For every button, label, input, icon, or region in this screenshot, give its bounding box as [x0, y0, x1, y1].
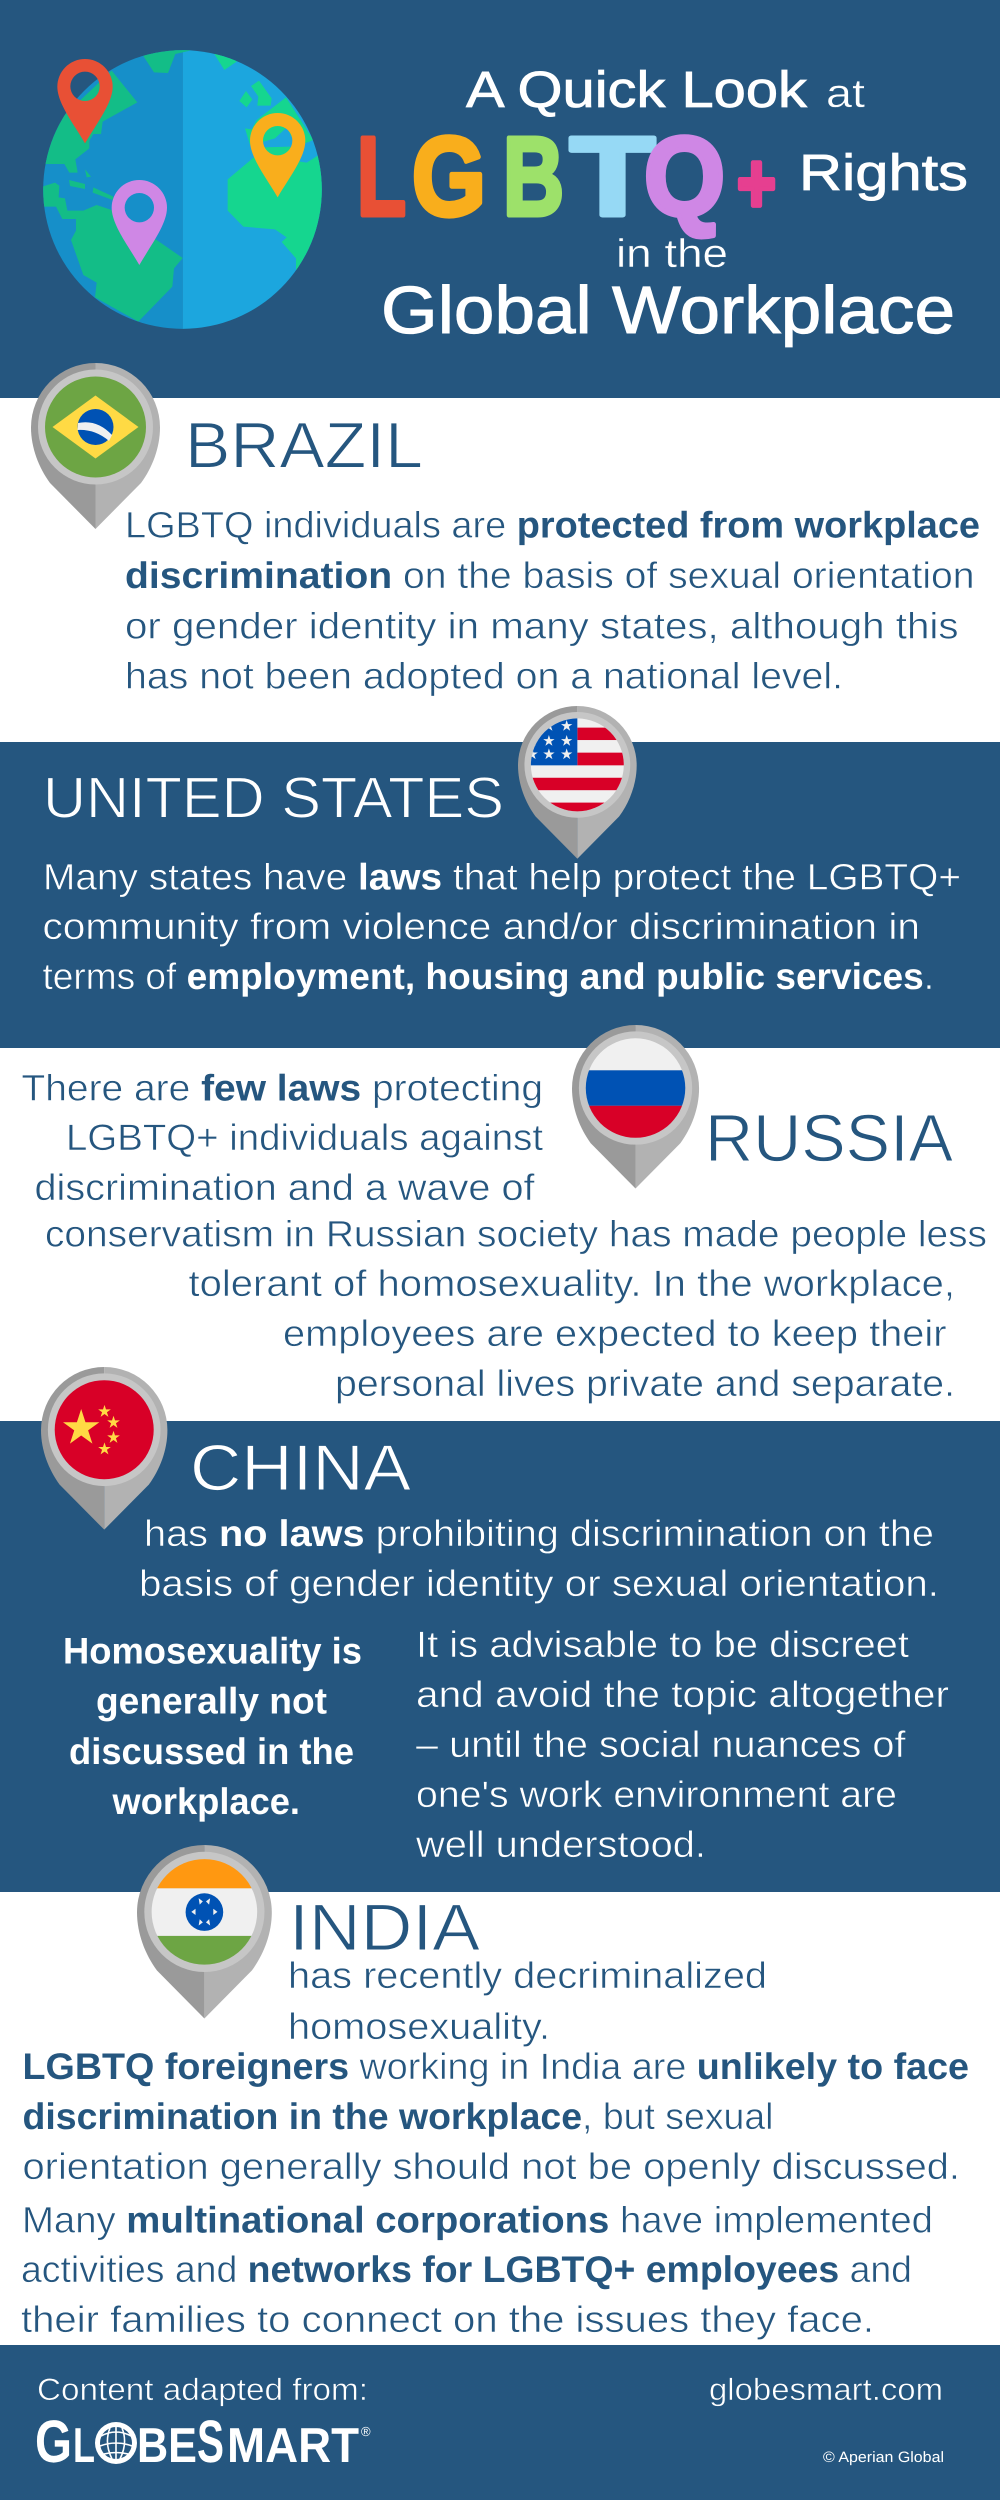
callout: homosexuality not discussed: generally not [96, 1680, 327, 1722]
icon: Russia flag pin [572, 1025, 699, 1189]
panel: India [0, 1845, 1000, 2345]
title: at [826, 72, 865, 116]
callout: homosexuality not discussed: discussed in the [69, 1731, 354, 1772]
icon: United States flag pin [518, 706, 637, 859]
logo: GlobeSmart: L [73, 2419, 95, 2473]
text: Brazil body: or gender identity in many states, although this [125, 606, 959, 646]
text: website: globesmart.com [709, 2372, 943, 2407]
text: Brazil body [125, 504, 980, 696]
heading: India: INDIA [289, 1890, 480, 1964]
title: Rights [799, 144, 968, 201]
icon: logo globe [95, 2422, 137, 2464]
text: India foreigners: LGBTQ foreigners working in India are unlikely to face [22, 2046, 969, 2087]
panel: Russia [0, 1025, 1000, 1421]
title: L [357, 114, 406, 239]
text: source credit: Content adapted from: [37, 2372, 368, 2407]
text: India corporations: activities and networks for LGBTQ+ employees and [21, 2249, 912, 2290]
text: India intro: has recently decriminalized [288, 1955, 767, 1996]
text: China intro: basis of gender identity or sexual orientation. [139, 1563, 939, 1604]
text: China advice [415, 1624, 949, 1865]
title [357, 61, 968, 348]
text: Brazil body: has not been adopted on a national level. [125, 656, 843, 696]
title: A Quick Look [466, 61, 808, 118]
text: India foreigners: orientation generally should not be openly discussed. [22, 2146, 960, 2187]
text: China advice: It is advisable to be discreet [416, 1624, 910, 1665]
title: Q [644, 114, 725, 239]
text: Russia body: tolerant of homosexuality. In the workplace, [188, 1263, 955, 1304]
heading: Brazil: BRAZIL [185, 408, 423, 482]
text: China intro: has no laws prohibiting discrimination on the [144, 1513, 934, 1554]
text: Russia body: employees are expected to keep their [283, 1313, 946, 1354]
panel: United States [0, 706, 1000, 1048]
text: China advice: and avoid the topic altogether [416, 1674, 949, 1715]
title: T [570, 114, 655, 239]
title: G [412, 114, 486, 239]
title: B [503, 114, 564, 239]
heading: Russia: RUSSIA [705, 1101, 953, 1176]
text: Russia body [22, 1068, 987, 1404]
panel: China [0, 1367, 1000, 1892]
text: United States body: community from violence and/or discrimination in [42, 906, 920, 947]
text: China advice: – until the social nuances of [416, 1724, 906, 1765]
title: Global Workplace [381, 273, 955, 348]
text: Russia body: conservatism in Russian society has made people less [45, 1214, 987, 1254]
text: India foreigners: discrimination in the workplace, but sexual [22, 2096, 774, 2137]
text: China advice: well understood. [415, 1824, 706, 1865]
text: Brazil body: LGBTQ individuals are protected from workplace [125, 504, 980, 546]
logo: GlobeSmart: ® [361, 2424, 371, 2439]
icon: India flag pin [137, 1845, 272, 2018]
panel: header [0, 0, 1000, 398]
logo: GlobeSmart: MART [227, 2419, 359, 2473]
text: United States body: terms of employment, housing and public services. [42, 956, 934, 997]
logo: GlobeSmart [35, 2408, 371, 2475]
text: India intro [288, 1955, 767, 2047]
callout: homosexuality not discussed: Homosexuality is [63, 1630, 362, 1672]
logo: GlobeSmart: G [35, 2408, 72, 2475]
panel: footer [0, 2345, 1000, 2500]
title: in the [616, 232, 728, 276]
title: + [737, 136, 776, 230]
text: China advice: one's work environment are [416, 1774, 897, 1815]
panel: Brazil [31, 363, 979, 696]
logo: GlobeSmart: BE [137, 2419, 197, 2473]
text: copyright: © Aperian Global [823, 2449, 944, 2466]
text: India corporations: their families to connect on the issues they face. [21, 2299, 874, 2340]
icon: China flag pin [41, 1367, 167, 1530]
text: Brazil body: discrimination on the basis of sexual orientation [125, 555, 974, 596]
text: United States body [42, 856, 961, 997]
text: Russia body: personal lives private and separate. [335, 1363, 955, 1404]
text: India intro: homosexuality. [288, 2006, 550, 2047]
text: United States body: Many states have laws that help protect the LGBTQ+ [43, 856, 961, 898]
heading: China: CHINA [190, 1431, 412, 1504]
text: India corporations: Many multinational corporations have implemented [22, 2200, 933, 2240]
text: Russia body: LGBTQ+ individuals against [66, 1117, 544, 1158]
text: China intro [139, 1513, 939, 1604]
text: India corporations [21, 2200, 933, 2340]
text: India foreigners [22, 2046, 969, 2187]
icon: Brazil flag pin [31, 363, 160, 529]
logo: GlobeSmart: S [197, 2408, 224, 2475]
heading: United States: UNITED STATES [43, 766, 504, 830]
icon: globe with map pins [43, 50, 322, 329]
text: Russia body: There are few laws protecting [22, 1068, 543, 1108]
text: Russia body: discrimination and a wave of [34, 1167, 535, 1208]
logo: GlobeSmart: O [96, 2419, 136, 2473]
callout: homosexuality not discussed: workplace. [112, 1781, 300, 1822]
callout: homosexuality not discussed [63, 1630, 362, 1822]
